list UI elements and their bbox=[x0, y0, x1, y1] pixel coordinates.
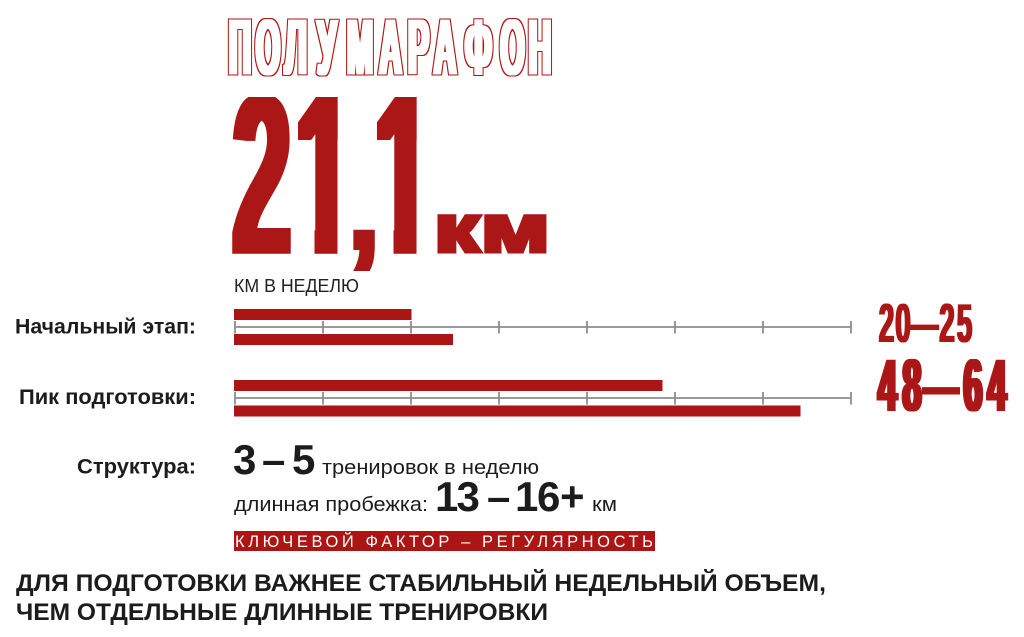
long run distance: км bbox=[592, 493, 617, 516]
distance: 21,1 km: 1 bbox=[374, 47, 432, 303]
distance: 21,1 km: км bbox=[434, 186, 550, 270]
distance: 21,1 km: 21 bbox=[233, 47, 353, 303]
row label: initial stage: Начальный этап: bbox=[15, 316, 196, 338]
distance: 21,1 km: , bbox=[351, 127, 377, 279]
long run distance bbox=[234, 473, 617, 520]
long run distance: длинная пробежка: bbox=[234, 493, 428, 516]
title: half marathon outline: ПОЛУМАРАФОН bbox=[229, 2, 551, 92]
distance: 21,1 km bbox=[232, 97, 546, 271]
conclusion text: ДЛЯ ПОДГОТОВКИ ВАЖНЕЕ СТАБИЛЬНЫЙ НЕДЕЛЬНЫЙ ОБЪЕМ, bbox=[16, 569, 826, 597]
bar chart: initial stage bbox=[234, 309, 851, 345]
conclusion text bbox=[16, 569, 826, 626]
workouts per week: 3–5 bbox=[233, 436, 315, 483]
chart unit label: КМ В НЕДЕЛЮ bbox=[234, 276, 359, 296]
workouts per week: тренировок в неделю bbox=[322, 456, 539, 479]
workouts per week bbox=[233, 436, 539, 483]
row label: structure: Структура: bbox=[77, 456, 196, 478]
row label: peak training: Пик подготовки: bbox=[19, 386, 196, 409]
key factor banner: КЛЮЧЕВОЙ ФАКТОР – РЕГУЛЯРНОСТЬ bbox=[235, 532, 653, 551]
long run distance: 13–16+ bbox=[435, 473, 585, 520]
conclusion text: ЧЕМ ОТДЕЛЬНЫЕ ДЛИННЫЕ ТРЕНИРОВКИ bbox=[16, 599, 548, 626]
range value: 20–25: 20—25 bbox=[879, 294, 972, 355]
bar chart: peak training bbox=[234, 380, 851, 416]
range value: 48–64: 48—64 bbox=[878, 345, 1006, 428]
